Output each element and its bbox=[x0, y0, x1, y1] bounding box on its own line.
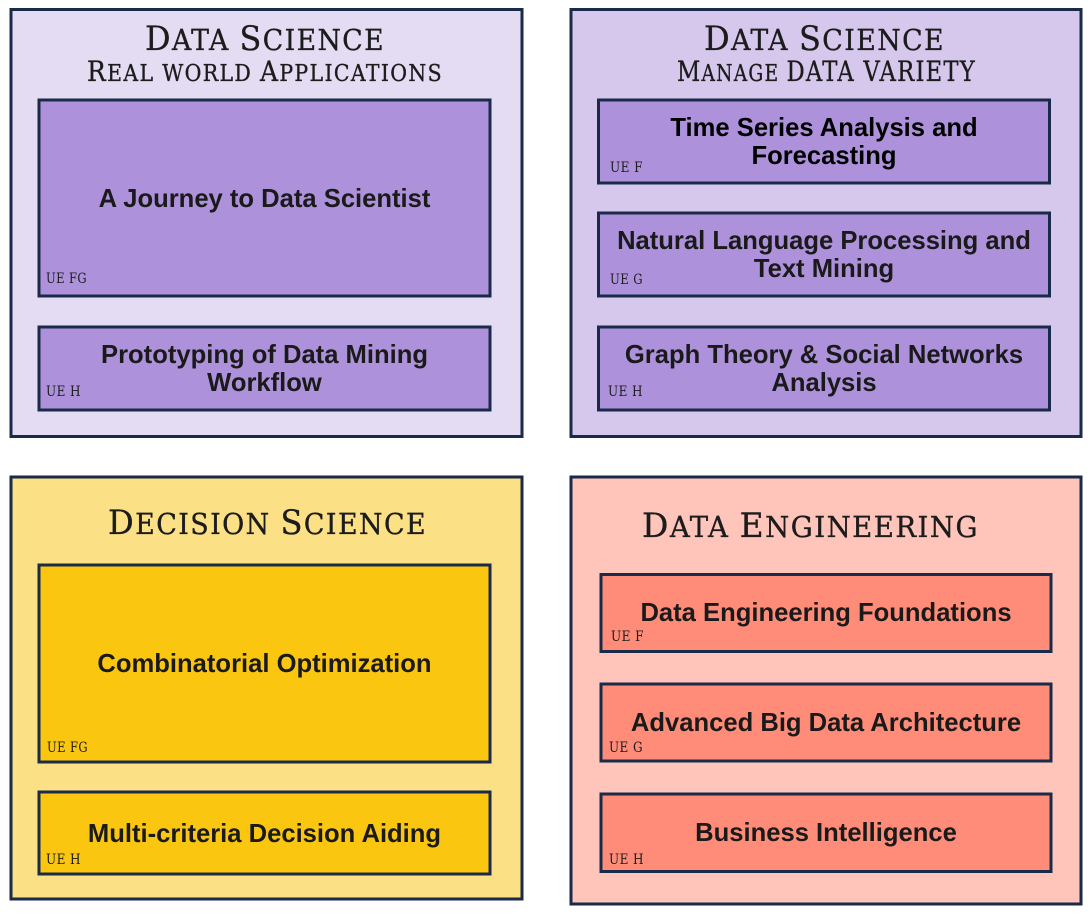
course: multi-criteria decision aiding: Multi-criteria Decision Aiding bbox=[88, 820, 441, 848]
course: business intelligence bbox=[601, 794, 1051, 872]
course: natural language processing and text mining: Text Mining bbox=[754, 255, 894, 283]
course: advanced big data architecture bbox=[601, 684, 1051, 761]
course: prototyping of data mining workflow: Prototyping of Data Mining bbox=[101, 341, 428, 369]
course: data engineering foundations: UE F bbox=[611, 629, 644, 645]
panel: decision science bbox=[11, 477, 522, 899]
course: natural language processing and text mining: UE G bbox=[610, 272, 643, 288]
course: natural language processing and text mining: Natural Language Processing and bbox=[617, 227, 1031, 255]
course: multi-criteria decision aiding bbox=[39, 792, 490, 874]
course: multi-criteria decision aiding: UE H bbox=[46, 852, 81, 868]
course: a journey to data scientist: UE FG bbox=[46, 271, 87, 287]
course: a journey to data scientist bbox=[39, 100, 490, 296]
course: data engineering foundations: Data Engineering Foundations bbox=[640, 599, 1012, 627]
course: business intelligence: Business Intelligence bbox=[695, 819, 957, 847]
course: combinatorial optimization: Combinatorial Optimization bbox=[97, 650, 432, 678]
subheading: real world applications: REAL WORLD APPLICATIONS bbox=[87, 55, 443, 88]
course: business intelligence: UE H bbox=[609, 852, 644, 868]
heading: data science: DATA SCIENCE bbox=[704, 19, 945, 59]
course: prototyping of data mining workflow: UE H bbox=[46, 384, 81, 400]
course: time series analysis and forecasting: UE F bbox=[610, 160, 643, 176]
course: prototyping of data mining workflow: Workflow bbox=[207, 369, 322, 397]
course: graph theory and social networks analysis: Graph Theory & Social Networks bbox=[625, 341, 1023, 369]
course: time series analysis and forecasting: Time Series Analysis and bbox=[670, 114, 978, 142]
heading: decision science: DECISION SCIENCE bbox=[108, 503, 427, 543]
course: graph theory and social networks analysis bbox=[598, 327, 1050, 410]
course: graph theory and social networks analysis: UE H bbox=[608, 384, 643, 400]
panel: data science manage data variety bbox=[571, 10, 1081, 436]
heading: data engineering: DATA ENGINEERING bbox=[642, 506, 979, 546]
course: time series analysis and forecasting: Forecasting bbox=[751, 142, 897, 170]
course: graph theory and social networks analysis: Analysis bbox=[771, 369, 877, 397]
panel: data science real world applications bbox=[11, 10, 522, 436]
course: combinatorial optimization bbox=[39, 565, 490, 762]
course: natural language processing and text mining bbox=[598, 213, 1050, 296]
course: advanced big data architecture: UE G bbox=[609, 740, 643, 756]
subheading: manage data variety: MANAGE DATA VARIETY bbox=[677, 55, 976, 88]
heading: data science: DATA SCIENCE bbox=[145, 19, 385, 59]
panel: data engineering bbox=[571, 477, 1081, 904]
course: combinatorial optimization: UE FG bbox=[47, 740, 88, 756]
course: time series analysis and forecasting bbox=[598, 100, 1050, 183]
course: prototyping of data mining workflow bbox=[39, 327, 490, 410]
course: a journey to data scientist: A Journey to Data Scientist bbox=[99, 185, 431, 213]
course: advanced big data architecture: Advanced Big Data Architecture bbox=[631, 709, 1021, 737]
course: data engineering foundations bbox=[601, 574, 1051, 652]
